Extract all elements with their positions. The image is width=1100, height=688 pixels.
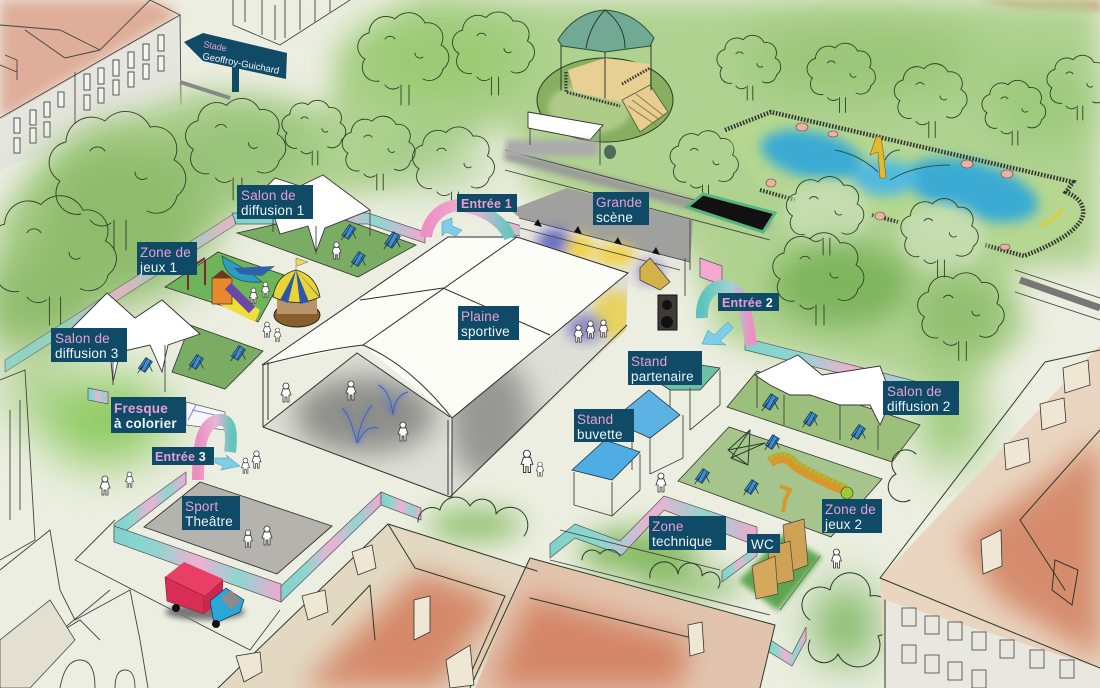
label: Entrée 3 — [152, 447, 214, 465]
label: Entrée 1: Entrée 1 — [461, 197, 512, 211]
label: Zone de jeux 1: jeux 1 — [139, 260, 177, 275]
label: Zone de jeux 2: Zone de — [825, 502, 876, 517]
lawn: salon de diffusion 2 — [727, 355, 920, 462]
label: Fresque à colorier: Fresque — [114, 401, 168, 416]
label: Salon de diffusion 2: diffusion 2 — [887, 399, 950, 414]
white tent 1 — [248, 175, 370, 252]
direction sign: Stade Geoffroy-Guichard — [184, 33, 287, 92]
label: Entrée 2: Entrée 2 — [722, 296, 773, 310]
label: Plaine sportive — [458, 306, 519, 340]
main tent — [262, 237, 637, 497]
label: Entrée 3: Entrée 3 — [155, 450, 206, 464]
gazebo garden bed — [537, 10, 673, 142]
people — [100, 320, 842, 568]
label: Salon de diffusion 1 — [237, 185, 313, 219]
label: Zone de jeux 2: jeux 2 — [824, 517, 862, 532]
truck — [165, 562, 245, 628]
label: Zone technique — [649, 516, 726, 550]
pale tree canopies over pond — [772, 181, 1003, 355]
label: Sport Théâtre: Theâtre — [185, 514, 233, 529]
fresque panel — [186, 402, 225, 430]
label: Zone de jeux 1 — [137, 242, 197, 275]
church bottom-left — [0, 370, 148, 688]
WC lawn and cabins — [739, 519, 822, 611]
speaker — [658, 295, 677, 330]
stand partenaire — [650, 362, 720, 430]
salmon roof corner top right — [975, 0, 1100, 12]
label: Grande scène: Grande — [596, 195, 642, 210]
label: Stand buvette — [574, 409, 634, 442]
spider climbing frame — [728, 430, 765, 465]
gazebo — [558, 10, 668, 132]
label: Fresque à colorier — [111, 397, 186, 433]
stand buvette front — [572, 440, 640, 516]
label: Salon de diffusion 1: diffusion 1 — [241, 203, 304, 218]
fountain statue — [870, 137, 886, 178]
label: Zone technique: Zone — [652, 519, 684, 534]
lawn: zone de jeux 1 — [165, 252, 320, 327]
entrée arches — [198, 205, 751, 480]
direction sign: Stade Geoffroy-Guichard: Geoffroy-Guichard — [201, 51, 280, 77]
label: Entrée 2 — [718, 293, 779, 311]
lawn: salon de diffusion 1 — [237, 175, 416, 277]
label: Salon de diffusion 3: diffusion 3 — [55, 346, 118, 361]
label: Salon de diffusion 3 — [51, 328, 127, 362]
sport théâtre floor — [144, 482, 332, 574]
label: Stand partenaire: partenaire — [631, 369, 694, 384]
label: Plaine sportive: sportive — [461, 324, 510, 339]
carousel — [273, 258, 320, 327]
label: Salon de diffusion 1: Salon de — [241, 188, 296, 203]
label: Zone de jeux 2 — [822, 499, 882, 533]
label: Stand buvette: buvette — [577, 427, 623, 442]
label: WC — [747, 534, 780, 553]
label: Plaine sportive: Plaine — [461, 309, 500, 324]
label: Grande scène — [593, 192, 649, 225]
direction sign: Stade Geoffroy-Guichard: Stade — [203, 39, 228, 53]
building: top centre facade — [233, 0, 350, 45]
label: Sport Théâtre — [182, 496, 240, 530]
stage: Grande scène — [510, 188, 693, 330]
lawn: salon de diffusion 3 — [70, 293, 263, 392]
trees over pond — [773, 177, 1004, 360]
label: Stand buvette: Stand — [577, 412, 613, 427]
label: WC: WC — [751, 537, 774, 552]
fences — [5, 213, 958, 666]
label: Salon de diffusion 2: Salon de — [887, 384, 942, 399]
label: Zone de jeux 1: Zone de — [140, 245, 191, 260]
right building — [880, 345, 1100, 688]
white awning — [506, 112, 616, 165]
label: Grande scène: scène — [596, 210, 633, 225]
pond — [725, 112, 1083, 256]
trees — [0, 12, 1100, 325]
label: Sport Théâtre: Sport — [185, 499, 218, 514]
label: Salon de diffusion 3: Salon de — [55, 331, 110, 346]
lawn: zone de jeux 2 — [678, 427, 882, 537]
shrub outlines — [418, 386, 950, 667]
black canopy — [687, 194, 775, 232]
road lines — [180, 82, 1100, 320]
bottom-centre roofs — [218, 524, 775, 688]
arrows — [215, 218, 733, 470]
caterpillar — [770, 458, 845, 490]
label: Entrée 1 — [457, 194, 517, 212]
label: Salon de diffusion 2 — [883, 381, 959, 415]
plaza ground lines — [75, 520, 820, 650]
label: Zone technique: technique — [652, 534, 712, 549]
label: Stand partenaire — [628, 351, 702, 385]
blue sprays on tent floor — [342, 385, 408, 443]
label: Stand partenaire: Stand — [631, 354, 667, 369]
stand buvette back — [622, 390, 683, 474]
building: top-left roof and facade — [0, 0, 181, 170]
label: Fresque à colorier: à colorier — [114, 416, 177, 431]
